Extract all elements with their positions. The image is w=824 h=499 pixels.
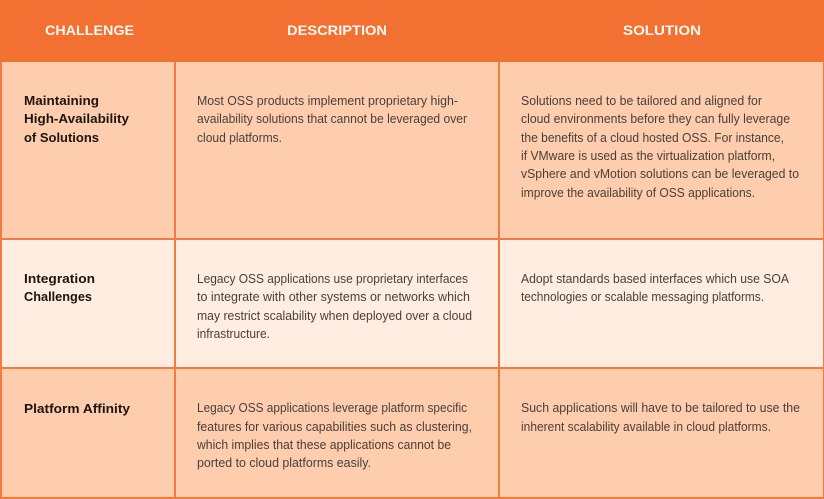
solution: row 3: Such applications will have to be tailored to use the (521, 401, 800, 415)
row 2: integration (24, 271, 790, 341)
solution: row 1: vSphere and vMotion solutions can be leveraged to (521, 167, 799, 181)
solution: row 1: the benefits of a cloud hosted OSS. For instance, (521, 131, 784, 145)
solution: row 1: improve the availability of OSS applications. (521, 186, 755, 200)
description: row 1: cloud platforms. (197, 131, 282, 145)
challenge: maintaining high-availability (24, 93, 130, 145)
description: row 3: which implies that these applications cannot be (196, 438, 451, 452)
heading: description: DESCRIPTION (287, 22, 387, 38)
description: row 2: may restrict scalability when deployed over a cloud (197, 309, 472, 323)
challenge: integration challenges: Integration (24, 271, 95, 286)
description: row 2: Legacy OSS applications use proprietary interfaces (197, 272, 468, 286)
row 3: platform affinity (24, 401, 800, 470)
challenge: maintaining high-availability: High-Availability (24, 111, 130, 126)
solution: row 1: if VMware is used as the virtualization platform, (521, 149, 775, 163)
description: row 3: features for various capabilities such as clustering, (197, 420, 472, 434)
description: row 1: Most OSS products implement proprietary high- (197, 94, 458, 108)
challenge: maintaining high-availability: of Solutions (24, 130, 99, 145)
heading: challenge: CHALLENGE (45, 22, 134, 38)
description: row 3: ported to cloud platforms easily. (197, 456, 371, 470)
solution: row 2: technologies or scalable messaging platforms. (521, 290, 764, 304)
solution: row 1 (521, 94, 799, 200)
description: row 2: infrastructure. (197, 327, 270, 341)
description: row 1 (197, 94, 467, 145)
header row (0, 0, 824, 62)
description: row 2: to integrate with other systems or networks which (197, 290, 470, 304)
challenge: integration challenges (24, 271, 95, 304)
solution: row 1: cloud environments before they can fully leverage (521, 112, 790, 126)
challenge: platform affinity: Platform Affinity (24, 401, 131, 416)
solution: row 3 (521, 401, 800, 434)
description: row 1: availability solutions that cannot be leveraged over (197, 112, 467, 126)
description: row 2 (197, 272, 472, 341)
challenge: maintaining high-availability: Maintaining (24, 93, 99, 108)
solution: row 1: Solutions need to be tailored and aligned for (521, 94, 762, 108)
description: row 3: Legacy OSS applications leverage platform specific (197, 401, 467, 415)
solution: row 2: Adopt standards based interfaces which use SOA (521, 272, 790, 286)
heading: solution: SOLUTION (623, 22, 701, 38)
row 1: high availability (24, 93, 799, 200)
solution: row 3: inherent scalability available in cloud platforms. (521, 420, 771, 434)
solution: row 2 (521, 272, 790, 304)
challenge: integration challenges: Challenges (24, 289, 92, 304)
description: row 3 (196, 401, 472, 470)
